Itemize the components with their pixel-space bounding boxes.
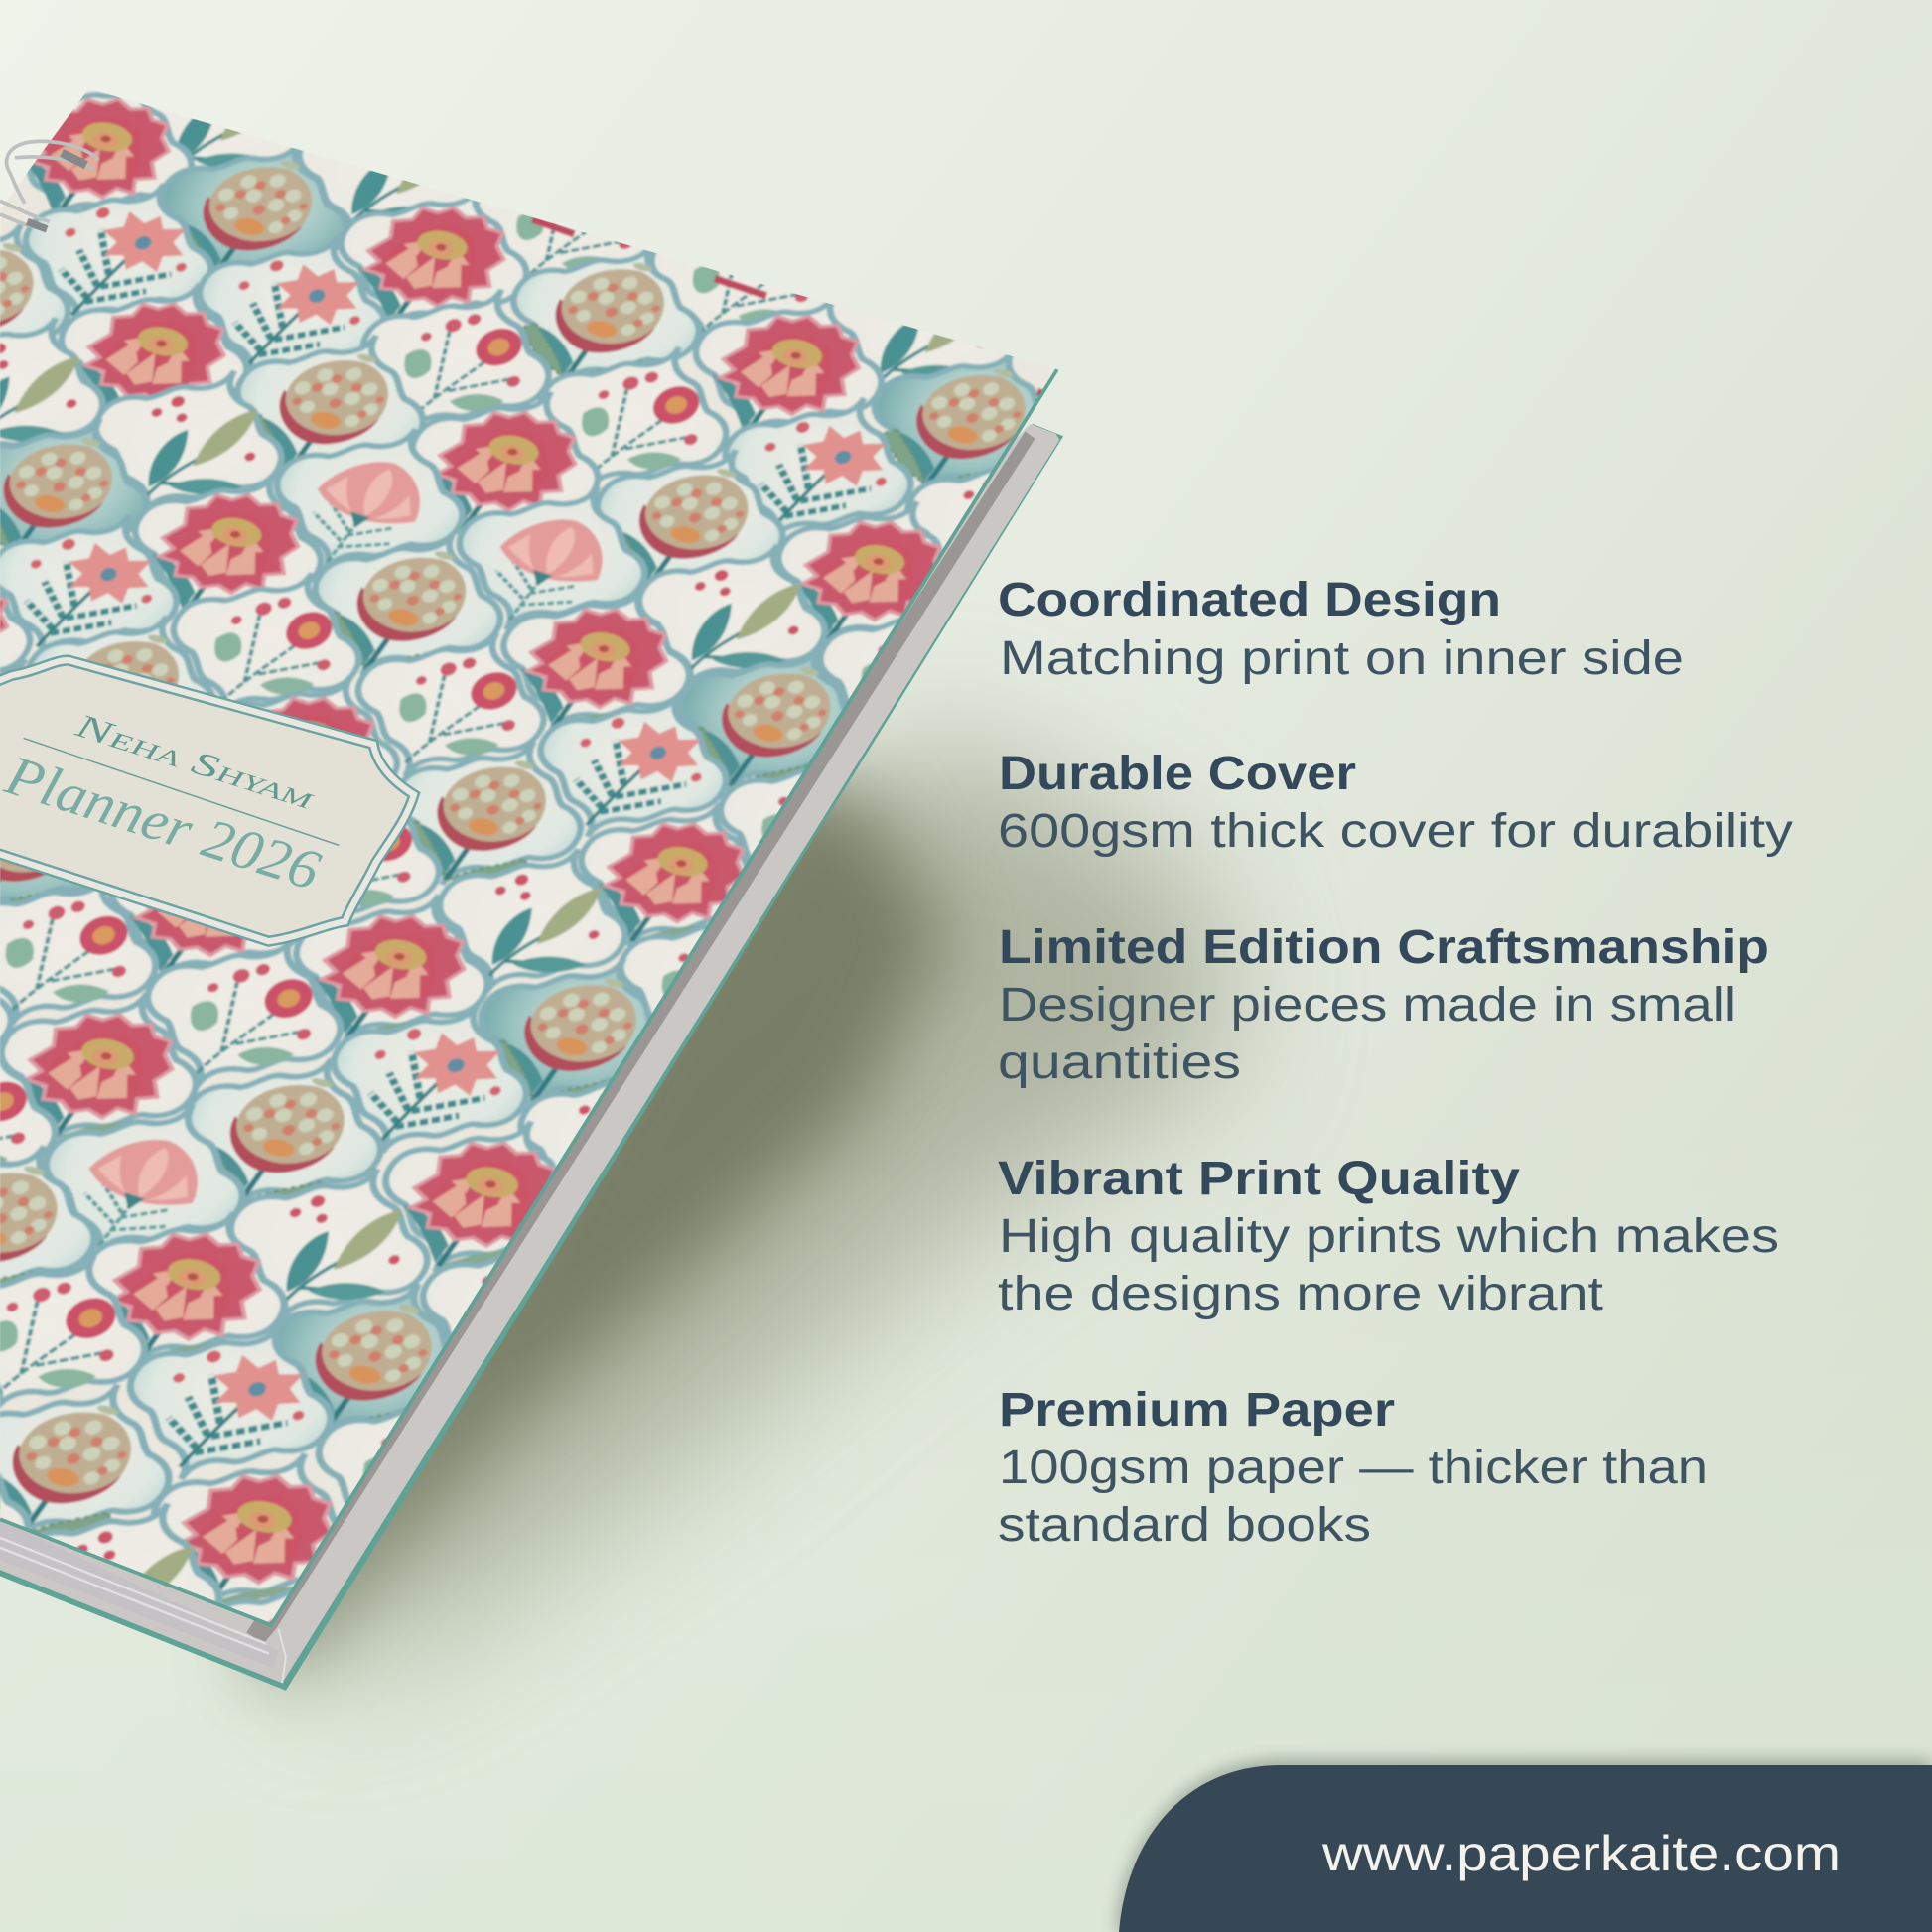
feature: limited edition craftsmanship: quantities — [998, 1036, 1241, 1089]
feature: vibrant print quality: High quality prints which makes — [999, 1210, 1779, 1263]
back cover and endpaper board — [0, 424, 1063, 1691]
feature: premium paper: standard books — [998, 1499, 1371, 1552]
name label plaque: Neha Shyam — [69, 707, 320, 818]
feature: limited edition craftsmanship — [998, 921, 1769, 1089]
feature: durable cover: Durable Cover — [999, 748, 1356, 800]
feature: premium paper — [998, 1384, 1708, 1552]
feature: vibrant print quality: the designs more vibrant — [998, 1268, 1603, 1320]
name label plaque — [0, 660, 414, 941]
feature: premium paper: 100gsm paper — thicker than — [999, 1442, 1708, 1494]
feature: vibrant print quality: Vibrant Print Quality — [998, 1153, 1520, 1205]
spiral binding rings — [0, 141, 98, 229]
planner book — [0, 90, 1063, 1691]
footer banner — [1116, 1759, 1932, 1932]
name label plaque: Planner 2026 — [0, 744, 328, 902]
feature: coordinated design: Matching print on inner side — [1000, 632, 1684, 685]
front cover floral ogee pattern — [0, 90, 1043, 1623]
feature: coordinated design: Coordinated Design — [998, 574, 1501, 626]
feature: limited edition craftsmanship: Designer pieces made in small — [999, 979, 1736, 1032]
feature: limited edition craftsmanship: Limited Edition Craftsmanship — [999, 921, 1769, 974]
feature: premium paper: Premium Paper — [999, 1384, 1395, 1437]
feature: vibrant print quality — [998, 1153, 1779, 1320]
feature: durable cover — [998, 748, 1793, 858]
feature list — [998, 574, 1793, 1552]
cover edge line — [0, 369, 1057, 1625]
website url: www.paperkaite.com — [1321, 1826, 1841, 1881]
book cast shadow — [246, 727, 1232, 1694]
feature: coordinated design — [998, 574, 1684, 685]
feature: durable cover: 600gsm thick cover for durability — [998, 805, 1793, 858]
